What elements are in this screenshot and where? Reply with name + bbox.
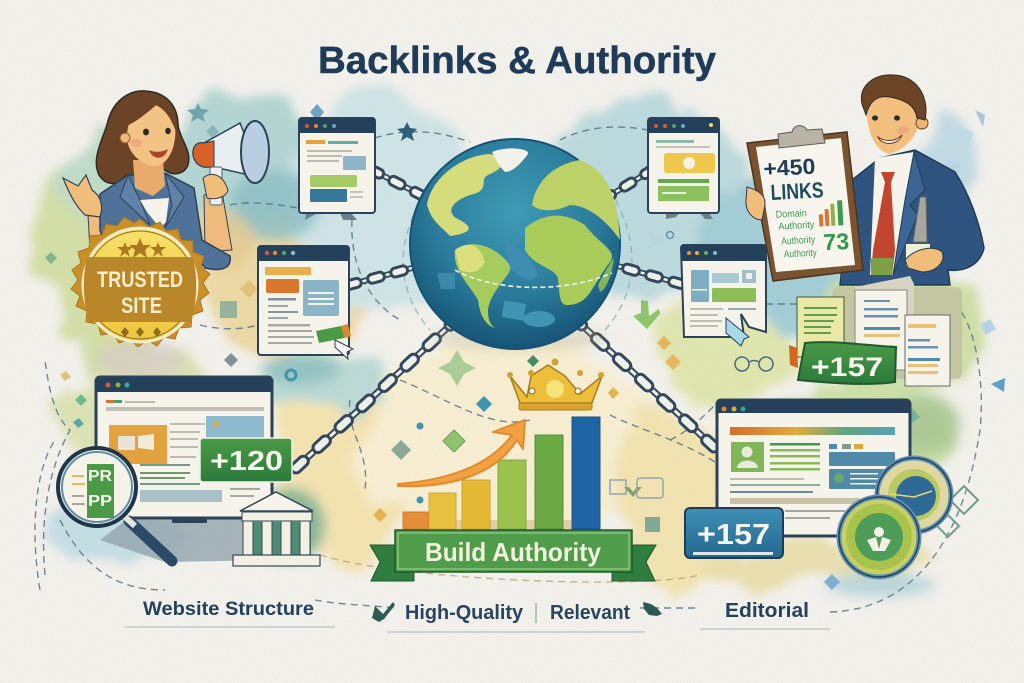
footer label: website structure: Website Structure xyxy=(143,599,314,620)
north america xyxy=(427,154,503,236)
face xyxy=(866,85,921,154)
left monitor xyxy=(96,377,275,562)
clipboard text: +450 xyxy=(763,154,816,181)
megaphone xyxy=(193,123,262,178)
footer label: high-quality and relevant: High-Quality xyxy=(405,602,524,624)
growth arrow xyxy=(398,420,525,486)
right arm xyxy=(204,192,232,252)
face xyxy=(127,105,175,166)
papers held xyxy=(906,244,930,266)
right monitor xyxy=(716,400,910,536)
browser window: top left xyxy=(299,118,375,220)
chain: globe to lower left xyxy=(296,318,458,468)
clipboard text xyxy=(763,152,850,261)
clipboard text: 73 xyxy=(823,228,850,255)
document stack xyxy=(797,276,962,386)
clipboard text: Authority xyxy=(781,235,815,248)
crown xyxy=(507,358,604,410)
trusted site badge: TRUSTED xyxy=(97,267,183,292)
shirt xyxy=(870,152,914,275)
build authority ribbon xyxy=(370,530,656,581)
badge: +157 green: +157 xyxy=(811,352,883,382)
footer label: high-quality and relevant xyxy=(372,602,662,632)
build authority ribbon: Build Authority xyxy=(425,537,601,567)
badge: +120: +120 xyxy=(210,445,283,476)
round badges xyxy=(839,458,951,577)
chain: globe to lower right xyxy=(574,318,714,447)
equator dashes xyxy=(455,270,612,287)
south america xyxy=(455,244,511,328)
greenland xyxy=(492,148,528,172)
scattered diamonds and dots xyxy=(45,103,1005,590)
suit xyxy=(840,150,984,285)
woman with megaphone xyxy=(63,91,269,270)
eyeglasses doodle xyxy=(735,357,773,371)
magnifying glass: PP xyxy=(88,493,112,510)
clipboard text: LINKS xyxy=(770,177,824,205)
africa xyxy=(525,216,612,305)
badge: +120 xyxy=(200,438,292,482)
magnifying glass xyxy=(58,448,172,561)
trusted site badge xyxy=(71,217,210,347)
ocean patches xyxy=(505,240,538,280)
globe xyxy=(410,139,620,350)
clipboard text: Authority xyxy=(778,220,815,233)
lapel xyxy=(893,152,925,275)
growth bar chart xyxy=(398,417,600,529)
businessman xyxy=(840,75,984,285)
raised hand xyxy=(63,175,102,217)
badge: +157 blue: +157 xyxy=(697,519,770,551)
neck xyxy=(133,160,165,196)
europe xyxy=(532,160,620,240)
watercolor map wash xyxy=(35,90,1005,612)
browser window: top right xyxy=(648,118,719,219)
browser window: middle right xyxy=(681,245,766,346)
badge: +157 blue xyxy=(685,508,783,558)
trusted site badge: SITE xyxy=(121,293,162,318)
clipboard text: Domain xyxy=(775,208,807,221)
chain: globe to upper left window xyxy=(372,170,425,197)
footer label: high-quality and relevant: Relevant xyxy=(550,602,630,624)
tie xyxy=(871,172,895,275)
dashed routes xyxy=(35,127,981,612)
browser window: middle left xyxy=(258,246,353,359)
shirt xyxy=(140,198,169,228)
chain: globe to middle left window xyxy=(349,268,412,285)
badge: +157 green xyxy=(789,342,896,384)
chain: globe to middle right window xyxy=(618,266,681,284)
hair xyxy=(96,91,189,183)
footer label: editorial xyxy=(700,600,830,629)
hair xyxy=(861,75,926,120)
clipboard xyxy=(746,126,863,281)
title: Backlinks & Authority xyxy=(318,40,716,82)
footer label: editorial: Editorial xyxy=(725,600,809,622)
blazer xyxy=(100,173,230,270)
left arm xyxy=(88,212,108,250)
lapels xyxy=(120,173,184,228)
magnifying glass: PR xyxy=(88,468,112,485)
clipboard text: Authority xyxy=(784,248,817,260)
chain: globe to upper right window xyxy=(606,170,652,198)
bank building xyxy=(233,492,320,566)
